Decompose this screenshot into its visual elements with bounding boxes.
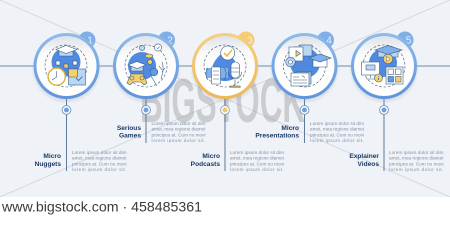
step 4 ring	[270, 33, 340, 104]
text block 2: lorem ipsum dolor sit.	[152, 138, 206, 143]
step 5 connector and node	[380, 98, 388, 171]
text block 4: principes at. Cum no movi	[310, 132, 364, 137]
text block 4: lorem ipsum dolor sit.	[310, 138, 364, 143]
footer strip	[0, 197, 450, 218]
step 3 number badge: 3	[247, 36, 253, 46]
text block 4: Lorem ipsum dolor sit dim	[310, 121, 364, 126]
footer stock id: www.bigstock.com · 458485361	[1, 200, 202, 214]
text block 4: amet, mea regione diamet	[310, 127, 365, 132]
icon: monitor, play button and grid	[362, 45, 405, 87]
step 5 number badge: 5	[406, 36, 412, 46]
step 5 ring	[349, 33, 419, 104]
step 5: explainer videos	[349, 32, 444, 172]
text block 5: lorem ipsum dolor sit.	[389, 167, 444, 172]
step 3: micro podcasts	[190, 32, 285, 172]
icon: podcast microphone and checklist	[204, 45, 246, 87]
text block 2: amet, mea regione diamet	[152, 127, 206, 132]
text block 3: lorem ipsum dolor sit.	[230, 167, 284, 172]
heading: serious games: Games	[119, 132, 141, 140]
heading: micro podcasts: Micro	[202, 153, 220, 160]
heading: micro podcasts: Podcasts	[191, 161, 220, 168]
step 5 number badge	[396, 32, 414, 48]
step 4 connector and node	[300, 98, 309, 143]
heading: explainer videos: Videos	[357, 161, 379, 168]
text block 5: principes at. Cum no movi	[389, 161, 444, 166]
text block 1: amet, mea regione diamet	[72, 156, 127, 161]
text block 3: Lorem ipsum dolor sit dim	[230, 150, 284, 155]
heading: explainer videos: Explainer	[349, 153, 379, 160]
heading: micro nuggets: Micro	[43, 153, 61, 160]
step 4: micro presentations	[255, 32, 365, 143]
icon: graduation cap, clock and puzzle	[45, 45, 87, 87]
step 2 ring	[111, 33, 181, 104]
text block 2: Lorem ipsum dolor sit dim	[152, 121, 206, 126]
heading: micro nuggets: Nuggets	[35, 161, 61, 168]
step 1 ring	[32, 33, 102, 104]
text block 1: Lorem ipsum dolor sit dim	[72, 150, 127, 155]
heading: serious games: Serious	[117, 125, 141, 132]
icon: slides, gear and cap	[284, 45, 331, 87]
step 2 number badge: 2	[167, 36, 173, 46]
step 1 number badge: 1	[87, 36, 93, 46]
horizontal timeline	[0, 65, 450, 67]
step 3 ring	[190, 33, 260, 104]
step 2: serious games	[111, 32, 206, 143]
step 1 connector and node	[62, 98, 71, 171]
text block 3: principes at. Cum no movi	[230, 161, 284, 166]
step 1 number badge	[78, 32, 96, 48]
text block 5: amet, mea regione diamet	[389, 156, 444, 161]
text block 2: principes at. Cum no movi	[152, 132, 206, 137]
text block 5: Lorem ipsum dolor sit dim	[389, 150, 444, 155]
icon: game controller and cap	[125, 44, 167, 87]
step 2 connector and node	[142, 98, 150, 143]
text block 1: principes at. Cum no movi	[72, 161, 126, 166]
step 3 number badge	[238, 32, 254, 48]
step 1: micro nuggets	[32, 32, 127, 172]
text block 3: amet, mea regione diamet	[230, 156, 285, 161]
step 3 connector and node	[221, 98, 229, 171]
heading: micro presentations: Presentations	[255, 132, 299, 140]
heading: micro presentations: Micro	[281, 125, 299, 132]
text block 1: lorem ipsum dolor sit.	[72, 167, 126, 172]
step 4 number badge: 4	[326, 36, 332, 46]
